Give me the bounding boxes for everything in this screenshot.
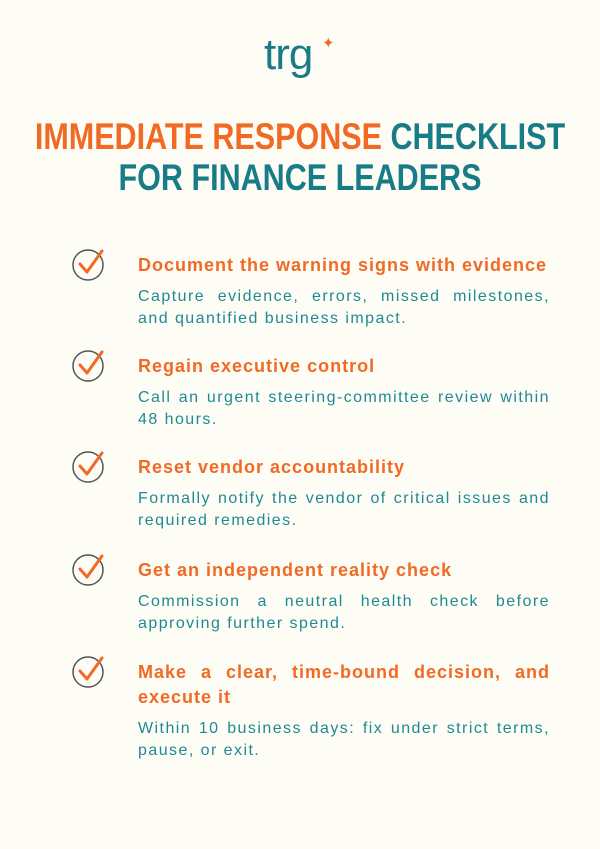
icon: check bbox=[72, 249, 104, 281]
item 1: Document the warning signs with evidence bbox=[138, 255, 547, 275]
item 1: Capture evidence, errors, missed milestones, and quantified business impact. bbox=[138, 288, 550, 327]
title bbox=[35, 116, 565, 198]
icon: check bbox=[72, 451, 104, 483]
icon: check bbox=[72, 350, 104, 382]
title: IMMEDIATE RESPONSE CHECKLIST bbox=[35, 116, 565, 157]
logo: ✦ bbox=[322, 35, 335, 52]
item 4: Commission a neutral health check before approving further spend. bbox=[138, 593, 550, 632]
item 5 bbox=[72, 656, 550, 759]
title: FOR FINANCE LEADERS bbox=[119, 157, 481, 198]
item 1 bbox=[72, 249, 550, 327]
item 5: Make a clear, time-bound decision, and execute it bbox=[138, 662, 550, 707]
item 3 bbox=[72, 451, 550, 529]
item 2: Regain executive control bbox=[138, 356, 375, 376]
item 4 bbox=[72, 554, 550, 632]
item 2: Call an urgent steering-committee review within 48 hours. bbox=[138, 389, 550, 428]
icon: check bbox=[72, 554, 104, 586]
item 4: Get an independent reality check bbox=[138, 560, 452, 580]
logo: trg bbox=[264, 30, 312, 79]
item 2 bbox=[72, 350, 550, 428]
icon: check bbox=[72, 656, 104, 688]
logo bbox=[264, 30, 335, 79]
item 5: Within 10 business days: fix under strict terms, pause, or exit. bbox=[138, 720, 550, 759]
item 3: Reset vendor accountability bbox=[138, 457, 405, 477]
item 3: Formally notify the vendor of critical issues and required remedies. bbox=[138, 490, 550, 529]
